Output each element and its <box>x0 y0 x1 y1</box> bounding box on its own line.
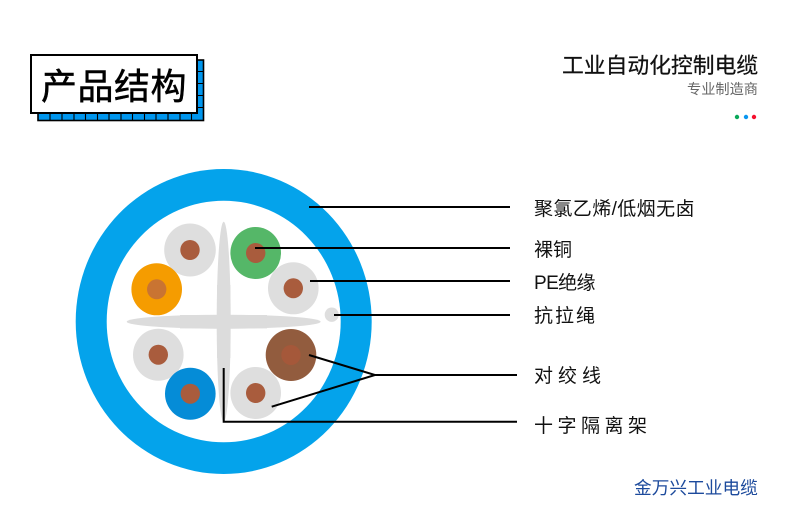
outer sheath <box>76 169 372 474</box>
three coloured dots <box>735 115 756 119</box>
tagline subtitle: 专业制造商 <box>687 82 758 98</box>
conductor: white-grey top left <box>164 224 216 276</box>
label: PE insulation: PE绝缘 <box>534 272 596 294</box>
labels <box>534 198 695 437</box>
conductor: white-grey right <box>268 262 319 314</box>
brand footer: 金万兴工业电缆 <box>634 478 758 498</box>
heading box <box>31 55 197 113</box>
header: company tagline <box>562 53 758 119</box>
heading shadow: blue segmented strip <box>38 60 204 121</box>
label: cross separator: 十字隔离架 <box>534 415 652 437</box>
tensile cord <box>325 308 339 322</box>
label: sheath: 聚氯乙烯/低烟无卤 <box>534 198 695 220</box>
conductor: brown <box>266 329 316 381</box>
conductor: white-grey lower right <box>230 367 281 419</box>
conductor: orange <box>131 263 182 315</box>
label: tensile cord: 抗拉绳 <box>534 305 597 327</box>
cross separator <box>127 222 321 422</box>
tagline title: 工业自动化控制电缆 <box>562 53 758 78</box>
label: bare copper: 裸铜 <box>534 239 572 261</box>
leader lines <box>224 207 517 422</box>
conductor: white-grey lower left <box>133 329 184 381</box>
cable cross-section diagram <box>76 169 372 474</box>
heading: product structure <box>31 55 204 121</box>
conductor: green <box>230 227 281 279</box>
conductor: blue <box>165 368 216 420</box>
inner white cavity <box>107 201 341 442</box>
label: twisted pair: 对绞线 <box>534 365 606 387</box>
heading text: 产品结构 <box>41 66 187 107</box>
